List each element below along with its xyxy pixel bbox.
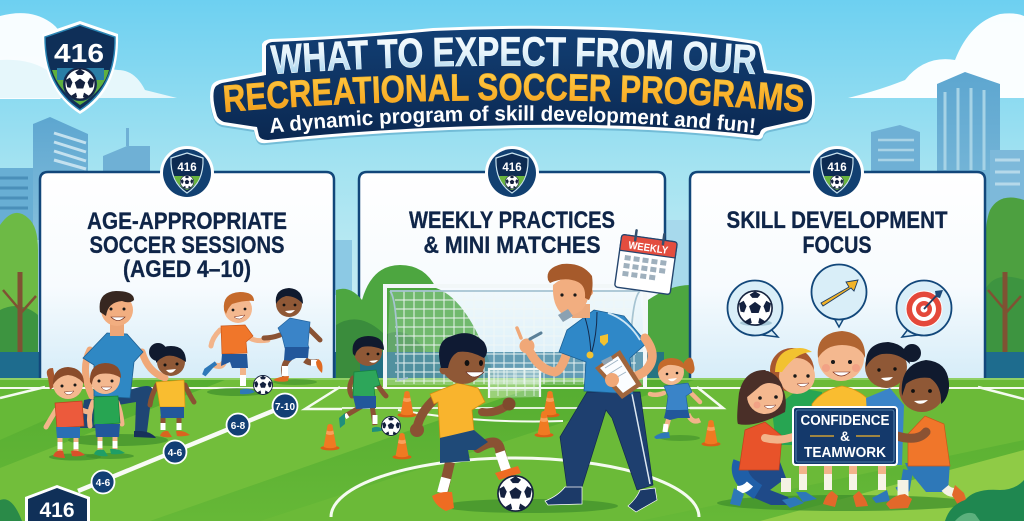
girl back right [865, 342, 921, 465]
confidence and teamwork sign: & [840, 429, 850, 444]
panel 1 heading: AGE-APPROPRIATE [87, 208, 287, 235]
coach with whistle and clipboard [517, 264, 657, 512]
skyline buildings [0, 72, 1024, 300]
confidence and teamwork sign: CONFIDENCE [800, 413, 890, 429]
foreground foliage [0, 480, 1024, 521]
boy in green left of goal [339, 336, 386, 432]
panel 3 heading: SKILL DEVELOPMENT [726, 207, 948, 234]
back row legs and cleats [796, 465, 890, 507]
panel badge 2: 416 [502, 162, 522, 174]
boy center [812, 331, 872, 412]
age marker 6-8: 6-8 [231, 421, 246, 432]
panel 1 heading: (AGED 4–10) [123, 256, 251, 283]
panel 2 heading: WEEKLY PRACTICES [409, 207, 615, 234]
age marker 4-6 second [164, 440, 186, 464]
confidence and teamwork sign [793, 407, 897, 465]
panel: skill development [690, 172, 985, 380]
bottom crest [25, 485, 90, 521]
title line 1: WHAT TO EXPECT FROM OUR [270, 36, 756, 74]
panel 2 heading [409, 207, 615, 259]
soccer ball left panel [254, 376, 272, 394]
soccer field [0, 378, 1024, 521]
girl in yellow shirt [149, 343, 194, 437]
boy front right [886, 360, 968, 509]
age marker 4-6 second: 4-6 [168, 448, 183, 459]
age marker 4-6: 4-6 [96, 478, 111, 489]
icon bubble: target [896, 280, 952, 337]
panel: weekly practices [336, 172, 690, 380]
girl with headband [770, 348, 822, 445]
confidence and teamwork sign: TEAMWORK [804, 445, 886, 461]
weekly calendar [615, 228, 678, 295]
clouds [0, 13, 1024, 99]
team of kids with sign [717, 331, 973, 511]
boy in green shirt [86, 363, 134, 459]
panel badge 3 [810, 146, 864, 200]
girl in blue running [650, 358, 700, 441]
age progression path [78, 394, 298, 494]
panel 3 heading: FOCUS [802, 232, 872, 259]
field lines [0, 387, 1024, 517]
club crest logo [42, 21, 118, 114]
title line 2: RECREATIONAL SOCCER PROGRAMS [224, 73, 804, 112]
panel 3 heading [726, 207, 948, 259]
panel badge 1: 416 [177, 162, 197, 174]
club crest logo: 416 [54, 38, 104, 68]
father kneeling [68, 291, 168, 446]
small goal [489, 369, 540, 398]
icon bubble: soccer ball [728, 280, 782, 337]
age marker 6-8 [226, 414, 250, 436]
panel 1 heading [87, 208, 287, 283]
weekly calendar: WEEKLY [628, 239, 669, 257]
sky background [0, 0, 1024, 380]
panel badge 2 [485, 146, 539, 200]
cones [320, 391, 720, 459]
age marker 4-6 [92, 470, 114, 494]
panel badge 3: 416 [827, 162, 847, 174]
panel: age-appropriate sessions [40, 172, 334, 380]
running boy in blue [264, 288, 322, 385]
panel 1 heading: SOCCER SESSIONS [90, 232, 284, 259]
age marker 7-10: 7-10 [275, 402, 295, 413]
subtitle: A dynamic program of skill development and fun! [270, 105, 755, 134]
soccer ball under foot [498, 476, 533, 511]
icon bubble: growth arrow [812, 264, 866, 327]
running boy in orange [204, 292, 268, 396]
main boy in yellow dribbling [410, 333, 618, 513]
goal with net [385, 286, 646, 387]
girl front left [730, 370, 804, 508]
bushes behind goal [336, 265, 690, 378]
side trees and park band [0, 198, 1024, 379]
panel 2 heading: & MINI MATCHES [424, 232, 600, 259]
title banner [210, 26, 815, 146]
girl in red shirt [46, 367, 101, 460]
panel badge 1 [160, 146, 214, 200]
soccer ball by green boy [382, 416, 400, 436]
age marker 7-10 [272, 394, 298, 418]
